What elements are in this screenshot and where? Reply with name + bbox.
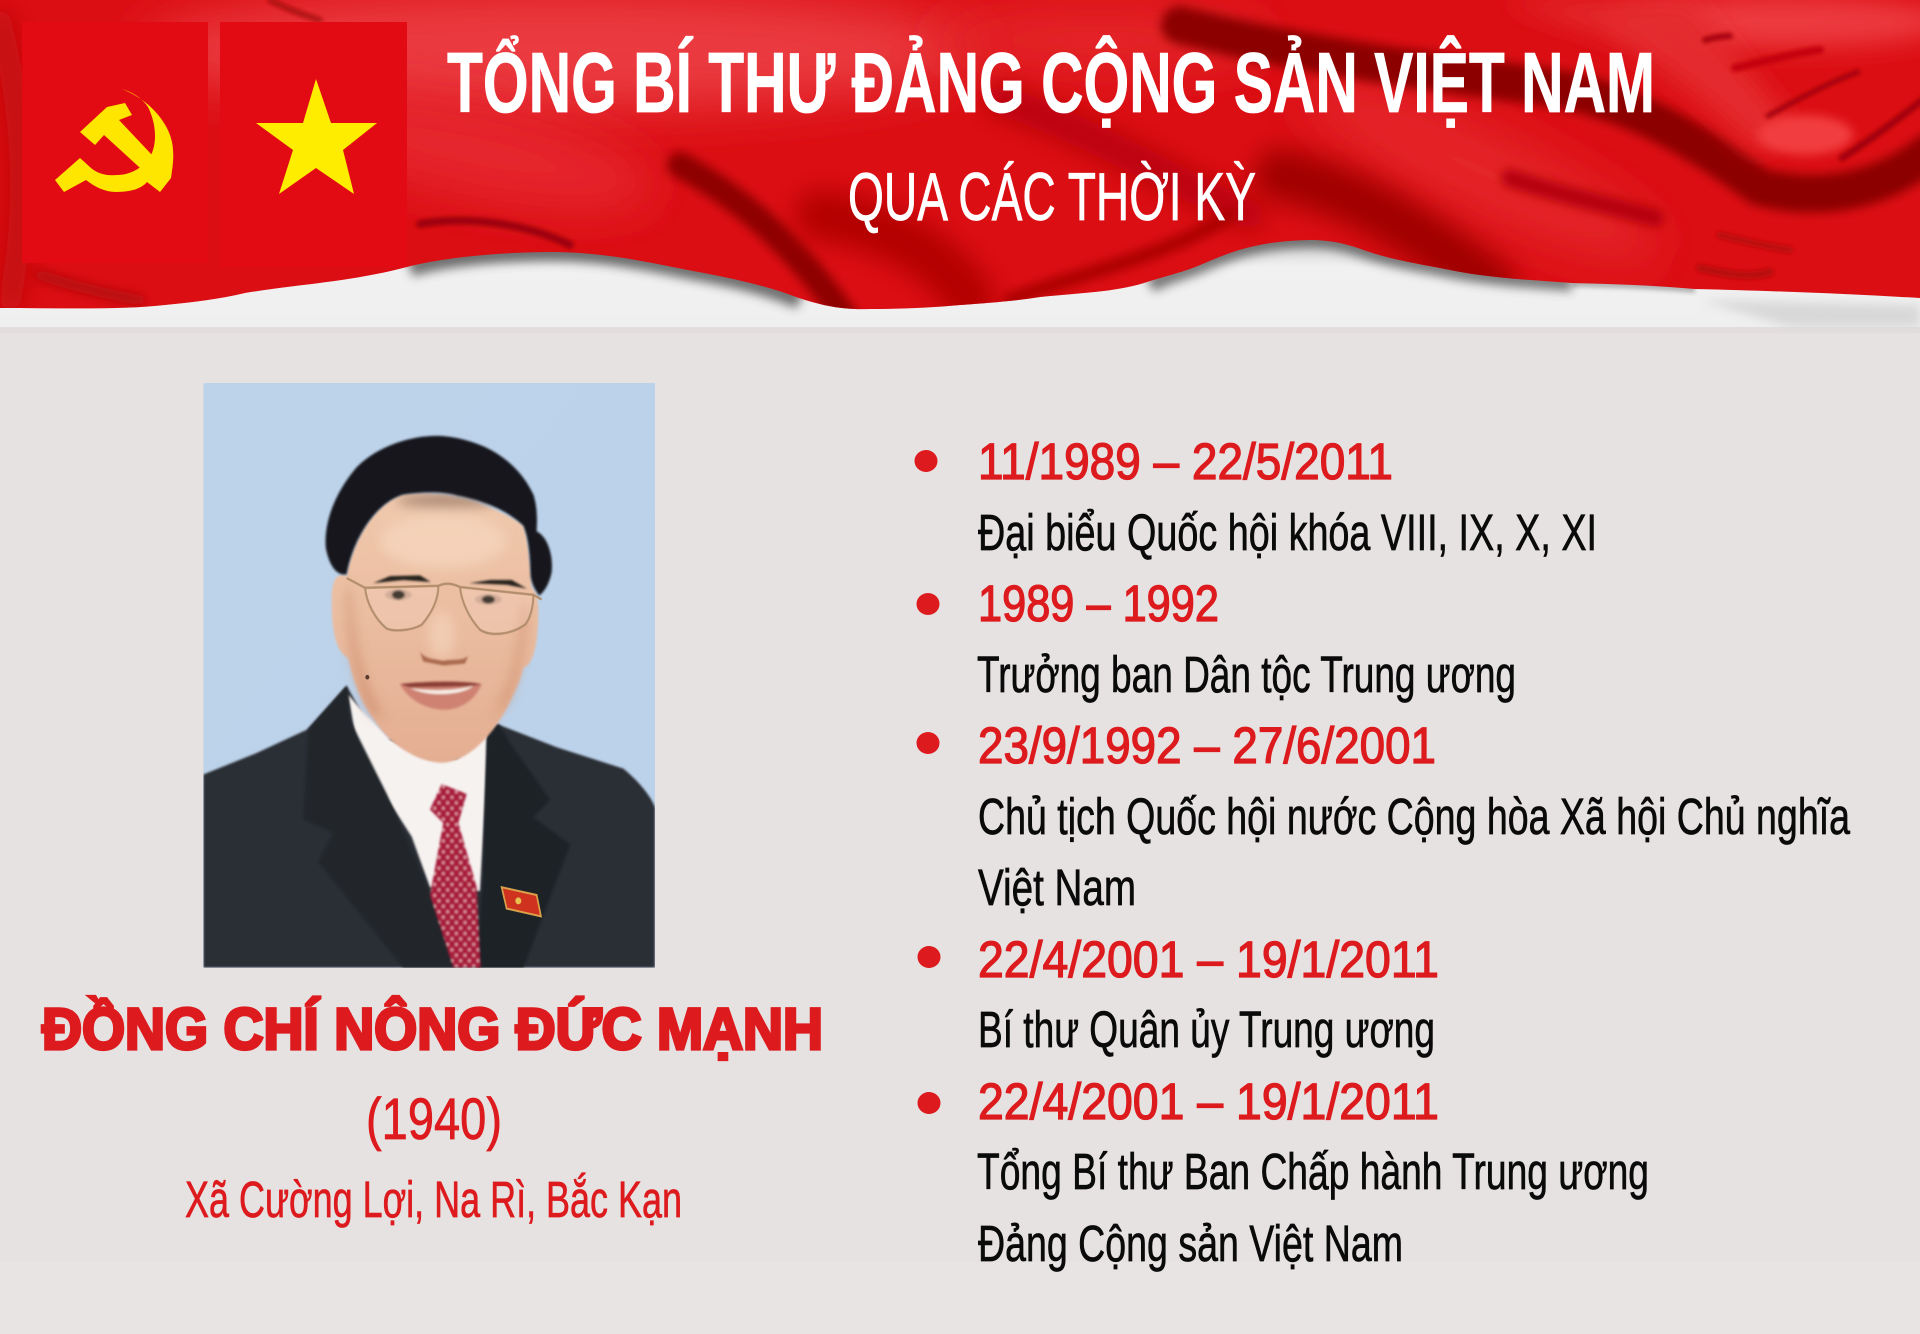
entry 3: Việt Nam	[978, 859, 1136, 916]
cheek mole	[365, 675, 369, 680]
career timeline	[914, 433, 1850, 1272]
entry 3: 23/9/1992 – 27/6/2001	[978, 717, 1436, 774]
Party flag: hammer and sickle	[22, 22, 208, 263]
subtitle: QUA CÁC THỜI KỲ	[848, 159, 1256, 235]
entry 4	[918, 931, 1439, 1058]
entry 1	[914, 433, 1597, 561]
entry 2	[916, 575, 1516, 703]
white cloth strip	[0, 235, 1920, 333]
eyebrows	[373, 575, 527, 589]
birth year: (1940)	[366, 1087, 502, 1152]
entry 5	[918, 1073, 1649, 1272]
red flag cloth with folds	[0, 0, 1920, 330]
header banner	[0, 0, 1920, 333]
entry 2: Trưởng ban Dân tộc Trung ương	[977, 646, 1516, 703]
birthplace: Xã Cường Lợi, Na Rì, Bắc Kạn	[185, 1171, 682, 1228]
right lapel	[477, 724, 570, 968]
Vietnam flag: gold star	[220, 22, 407, 267]
entry 4: 22/4/2001 – 19/1/2011	[978, 931, 1439, 988]
entry 1: Đại biểu Quốc hội khóa VIII, IX, X, XI	[978, 504, 1597, 561]
entry 5: Tổng Bí thư Ban Chấp hành Trung ương	[977, 1143, 1649, 1200]
entry 3	[916, 717, 1850, 916]
glasses	[347, 578, 542, 634]
lapel pin	[502, 887, 541, 916]
name heading: ĐỒNG CHÍ NÔNG ĐỨC MẠNH	[42, 997, 823, 1062]
tie	[430, 784, 481, 968]
portrait photo	[203, 383, 655, 968]
left lapel	[303, 686, 457, 968]
entry 1: 11/1989 – 22/5/2011	[978, 433, 1393, 490]
shirt	[348, 695, 488, 891]
hair	[326, 436, 552, 596]
entry 4: Bí thư Quân ủy Trung ương	[978, 1001, 1435, 1058]
face	[332, 494, 538, 763]
entry 5: Đảng Cộng sản Việt Nam	[978, 1215, 1403, 1272]
entry 2: 1989 – 1992	[978, 575, 1219, 632]
lower background band	[0, 1262, 1920, 1334]
entry 5: 22/4/2001 – 19/1/2011	[978, 1073, 1439, 1130]
eyes	[385, 589, 502, 605]
nose	[420, 652, 468, 666]
suit	[203, 686, 655, 968]
face shading	[347, 493, 527, 720]
mouth	[400, 681, 482, 710]
sky backdrop	[203, 383, 655, 968]
